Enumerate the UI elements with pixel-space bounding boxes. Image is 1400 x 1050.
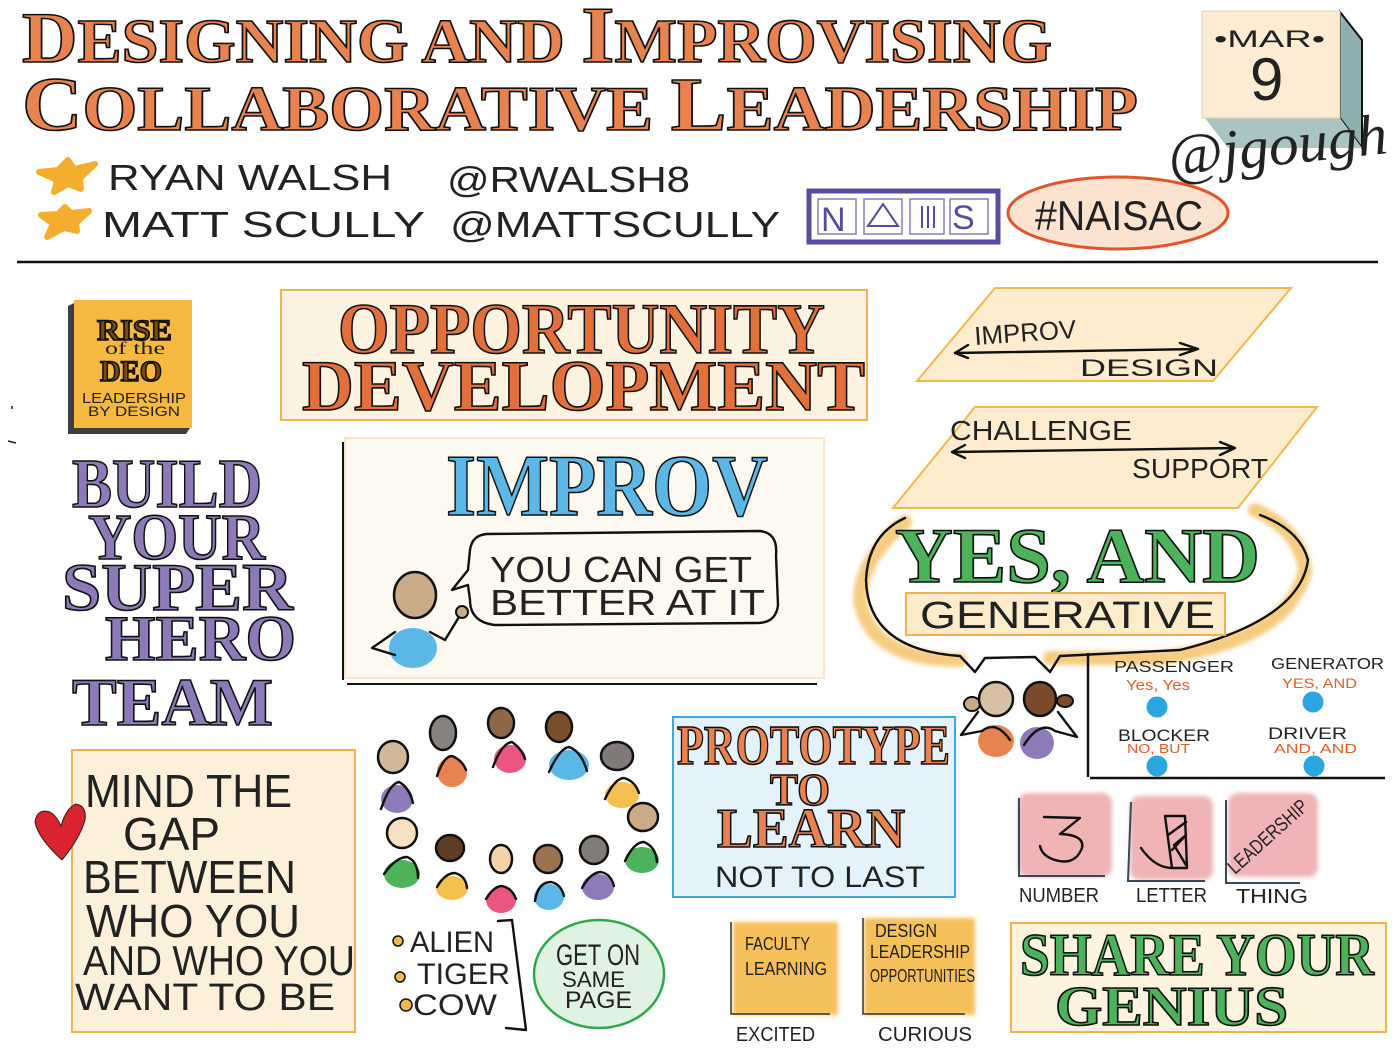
- speech bubble: yes, and: YES, AND: [895, 512, 1260, 599]
- speech bubble: BETTER AT IT: [490, 582, 765, 623]
- arrow: [952, 442, 1235, 458]
- book: Rise of the DEO: BY DESIGN: [88, 403, 180, 419]
- panel: share your genius: [1011, 922, 1386, 1038]
- presenters: RYAN WALSH: [108, 157, 392, 198]
- person: [372, 572, 468, 668]
- icon: star second: [41, 207, 89, 237]
- badge: get on same page: SAME: [562, 967, 625, 992]
- panel: mind the gap: GAP: [123, 808, 220, 860]
- calendar: date: •MAR•: [1214, 26, 1325, 53]
- quadrant: conversation roles: [1088, 653, 1385, 778]
- circle of people: [378, 708, 659, 913]
- hashtag bubble: #NAISAC: [1035, 192, 1203, 239]
- presenters: @RWALSH8: [447, 159, 690, 200]
- book: Rise of the DEO: RISE: [97, 314, 172, 347]
- panel: share your genius: GENIUS: [1055, 976, 1288, 1038]
- card: number: [1018, 793, 1112, 907]
- bracket: [498, 920, 526, 1030]
- list: alien tiger cow: TIGER: [417, 958, 510, 991]
- sticky note: design leadership opportunities: DESIGN: [875, 921, 937, 941]
- sticky note: design leadership opportunities: LEADERSHIP: [870, 942, 970, 962]
- person 6: [625, 803, 659, 873]
- heading: build your super hero team: BUILD: [72, 446, 262, 523]
- person 1: [378, 741, 413, 813]
- person 3: [488, 708, 526, 773]
- hashtag bubble: [1008, 177, 1228, 249]
- person 2: [430, 716, 467, 787]
- quadrant: conversation roles: GENERATOR: [1271, 656, 1384, 673]
- person 9: [486, 845, 516, 913]
- calendar: date: [1202, 11, 1362, 148]
- badge: get on same page: [534, 920, 664, 1028]
- person 5: [601, 742, 639, 808]
- book: Rise of the DEO: of the: [105, 338, 165, 358]
- quadrant: conversation roles: BLOCKER: [1118, 726, 1210, 745]
- book: Rise of the DEO: DEO: [100, 355, 162, 388]
- sticky note: faculty learning: [731, 922, 838, 1046]
- title: COLLABORATIVE LEADERSHIP: [22, 63, 1138, 147]
- panel: challenge-support spectrum: [893, 407, 1317, 508]
- sticky note: design leadership opportunities: CURIOUS: [878, 1024, 972, 1046]
- panel: mind the gap: [72, 750, 355, 1032]
- speech bubble: [452, 531, 778, 625]
- quadrant: conversation roles: PASSENGER: [1114, 659, 1234, 676]
- logo: NAIS: [809, 191, 998, 242]
- badge: get on same page: PAGE: [565, 987, 632, 1014]
- presenters: [39, 157, 780, 245]
- panel: opportunity development: DEVELOPMENT: [302, 346, 865, 426]
- sticky note: design leadership opportunities: OPPORTUNITIES: [870, 966, 975, 986]
- panel: improv: IMPROV: [446, 438, 768, 535]
- card: letter: [1128, 796, 1213, 907]
- handle: jgough: @jgough: [1165, 101, 1390, 189]
- quadrant: conversation roles: AND, AND: [1274, 741, 1357, 756]
- icon: star: [39, 160, 95, 192]
- heading: build your super hero team: SUPER: [62, 549, 294, 625]
- person 11: [580, 836, 614, 900]
- logo: NAIS: N: [821, 201, 846, 239]
- panel: improv-design spectrum: IMPROV: [973, 314, 1078, 351]
- logo: NAIS: S: [952, 199, 975, 237]
- quadrant: conversation roles: NO, BUT: [1127, 741, 1190, 756]
- list: alien tiger cow: ALIEN: [410, 926, 494, 959]
- person 10: [534, 845, 564, 910]
- panel: mind the gap: WANT TO BE: [75, 977, 335, 1019]
- speech bubble: YOU CAN GET: [490, 549, 752, 590]
- book: Rise of the DEO: LEADERSHIP: [82, 390, 186, 407]
- person 7: [384, 818, 420, 888]
- quadrant: conversation roles: DRIVER: [1268, 724, 1347, 743]
- two people talking: [961, 682, 1077, 759]
- heading: build your super hero team: YOUR: [88, 501, 266, 574]
- presenters: @MATTSCULLY: [450, 204, 780, 245]
- card: thing: [1224, 793, 1318, 908]
- label box: generative: GENERATIVE: [920, 595, 1215, 637]
- sticky note: design leadership opportunities: [863, 918, 975, 1046]
- panel: prototype to learn: NOT TO LAST: [715, 861, 925, 894]
- icon: heart: [35, 804, 85, 860]
- card: thing: LEADERSHIP: [1224, 795, 1313, 879]
- quadrant: conversation roles: Yes, Yes: [1126, 677, 1190, 694]
- calendar: date: 9: [1250, 46, 1283, 113]
- panel: mind the gap: WHO YOU: [86, 895, 300, 947]
- card: number: NUMBER: [1019, 885, 1099, 907]
- marks: [8, 406, 16, 443]
- arrow: [955, 343, 1198, 358]
- book: Rise of the DEO: [68, 300, 192, 434]
- heading: build your super hero team: [62, 446, 296, 740]
- sticky note: faculty learning: LEARNING: [745, 959, 827, 979]
- panel: improv: [343, 438, 824, 684]
- panel: improv-design spectrum: [917, 288, 1291, 382]
- panel: prototype to learn: TO: [770, 764, 830, 815]
- heading: build your super hero team: HERO: [105, 603, 296, 675]
- panel: mind the gap: BETWEEN: [83, 851, 296, 903]
- speech bubble: yes, and: [860, 510, 1308, 672]
- badge: get on same page: GET ON: [556, 939, 640, 972]
- panel: mind the gap: MIND THE: [85, 765, 292, 817]
- panel: prototype to learn: [673, 715, 955, 897]
- heading: build your super hero team: TEAM: [72, 664, 273, 740]
- panel: challenge-support spectrum: SUPPORT: [1132, 453, 1268, 484]
- list: alien tiger cow: [393, 920, 526, 1030]
- title: [22, 0, 1138, 147]
- panel: opportunity development: OPPORTUNITY: [338, 289, 825, 369]
- person 4: [546, 712, 589, 780]
- card: thing: THING: [1236, 886, 1308, 908]
- presenters: MATT SCULLY: [102, 204, 425, 245]
- panel: prototype to learn: LEARN: [717, 798, 905, 860]
- card: letter: LETTER: [1136, 885, 1207, 907]
- panel: opportunity development: [281, 289, 867, 426]
- panel: mind the gap: AND WHO YOU: [83, 937, 355, 984]
- divider: [17, 261, 1378, 263]
- quadrant: conversation roles: YES, AND: [1282, 675, 1357, 691]
- list: alien tiger cow: COW: [413, 989, 498, 1022]
- person 8: [436, 835, 468, 900]
- sticky note: faculty learning: FACULTY: [745, 934, 810, 954]
- sticky note: faculty learning: EXCITED: [736, 1024, 815, 1046]
- panel: improv-design spectrum: DESIGN: [1080, 355, 1218, 382]
- panel: prototype to learn: PROTOTYPE: [677, 715, 950, 777]
- panel: challenge-support spectrum: CHALLENGE: [950, 415, 1132, 446]
